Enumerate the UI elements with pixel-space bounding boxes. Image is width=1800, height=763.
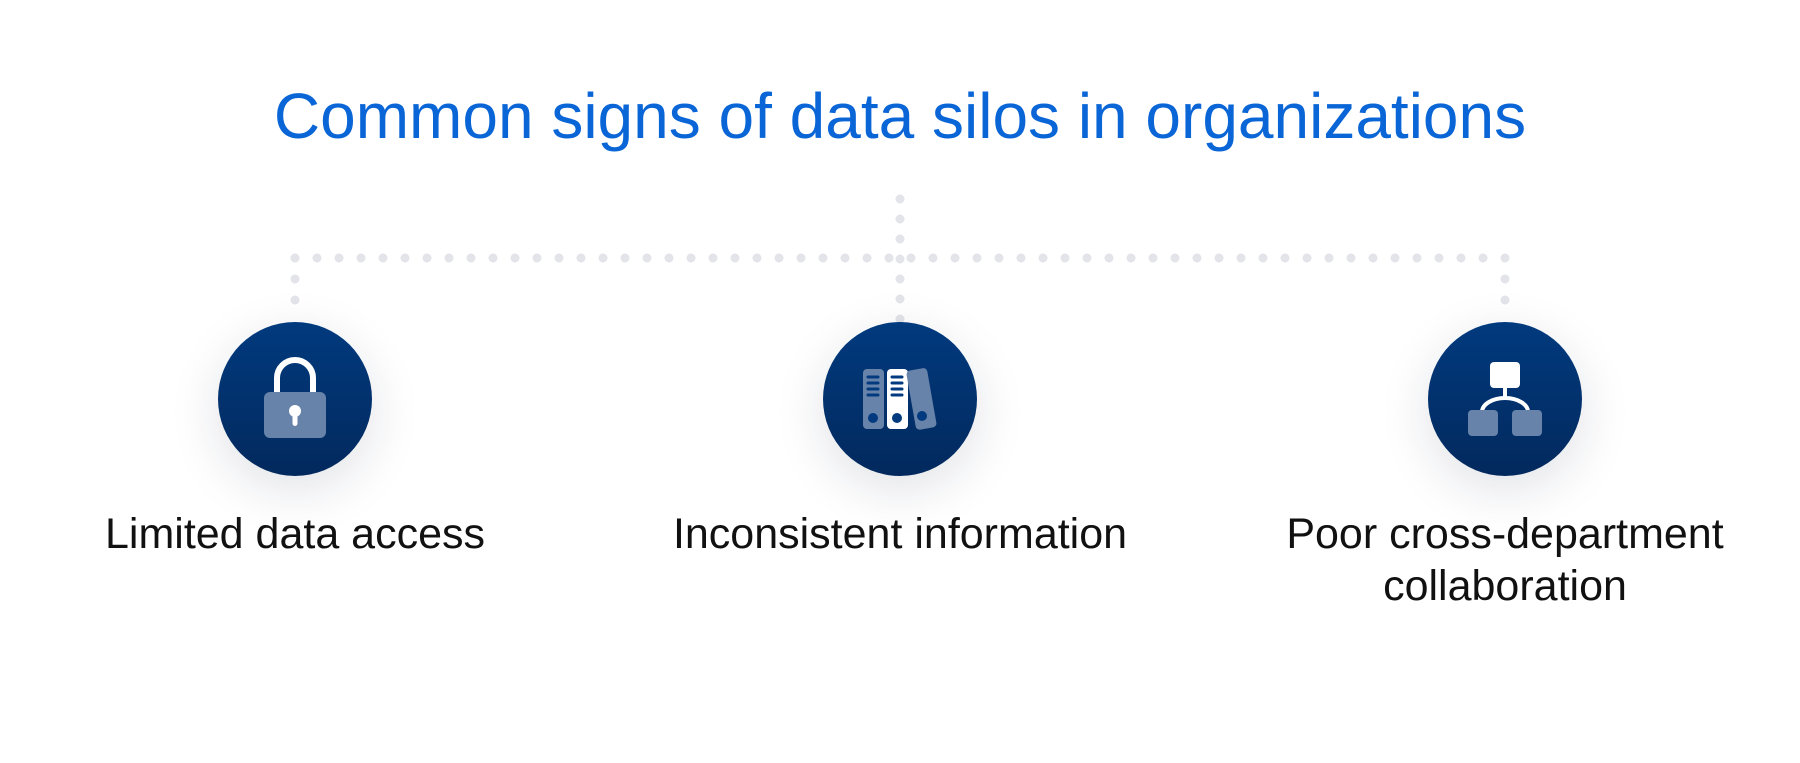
title: Common signs of data silos in organizations xyxy=(274,80,1526,152)
label: inconsistent information: Inconsistent information xyxy=(673,510,1127,558)
icon: binders circle xyxy=(823,322,977,476)
label: poor collaboration xyxy=(1286,510,1724,610)
label: limited data access: Limited data access xyxy=(105,510,485,558)
icon: lock circle xyxy=(218,322,372,476)
label: poor collaboration: Poor cross-department xyxy=(1286,510,1724,558)
label: poor collaboration: collaboration xyxy=(1383,562,1627,610)
icon: hierarchy circle xyxy=(1428,322,1582,476)
